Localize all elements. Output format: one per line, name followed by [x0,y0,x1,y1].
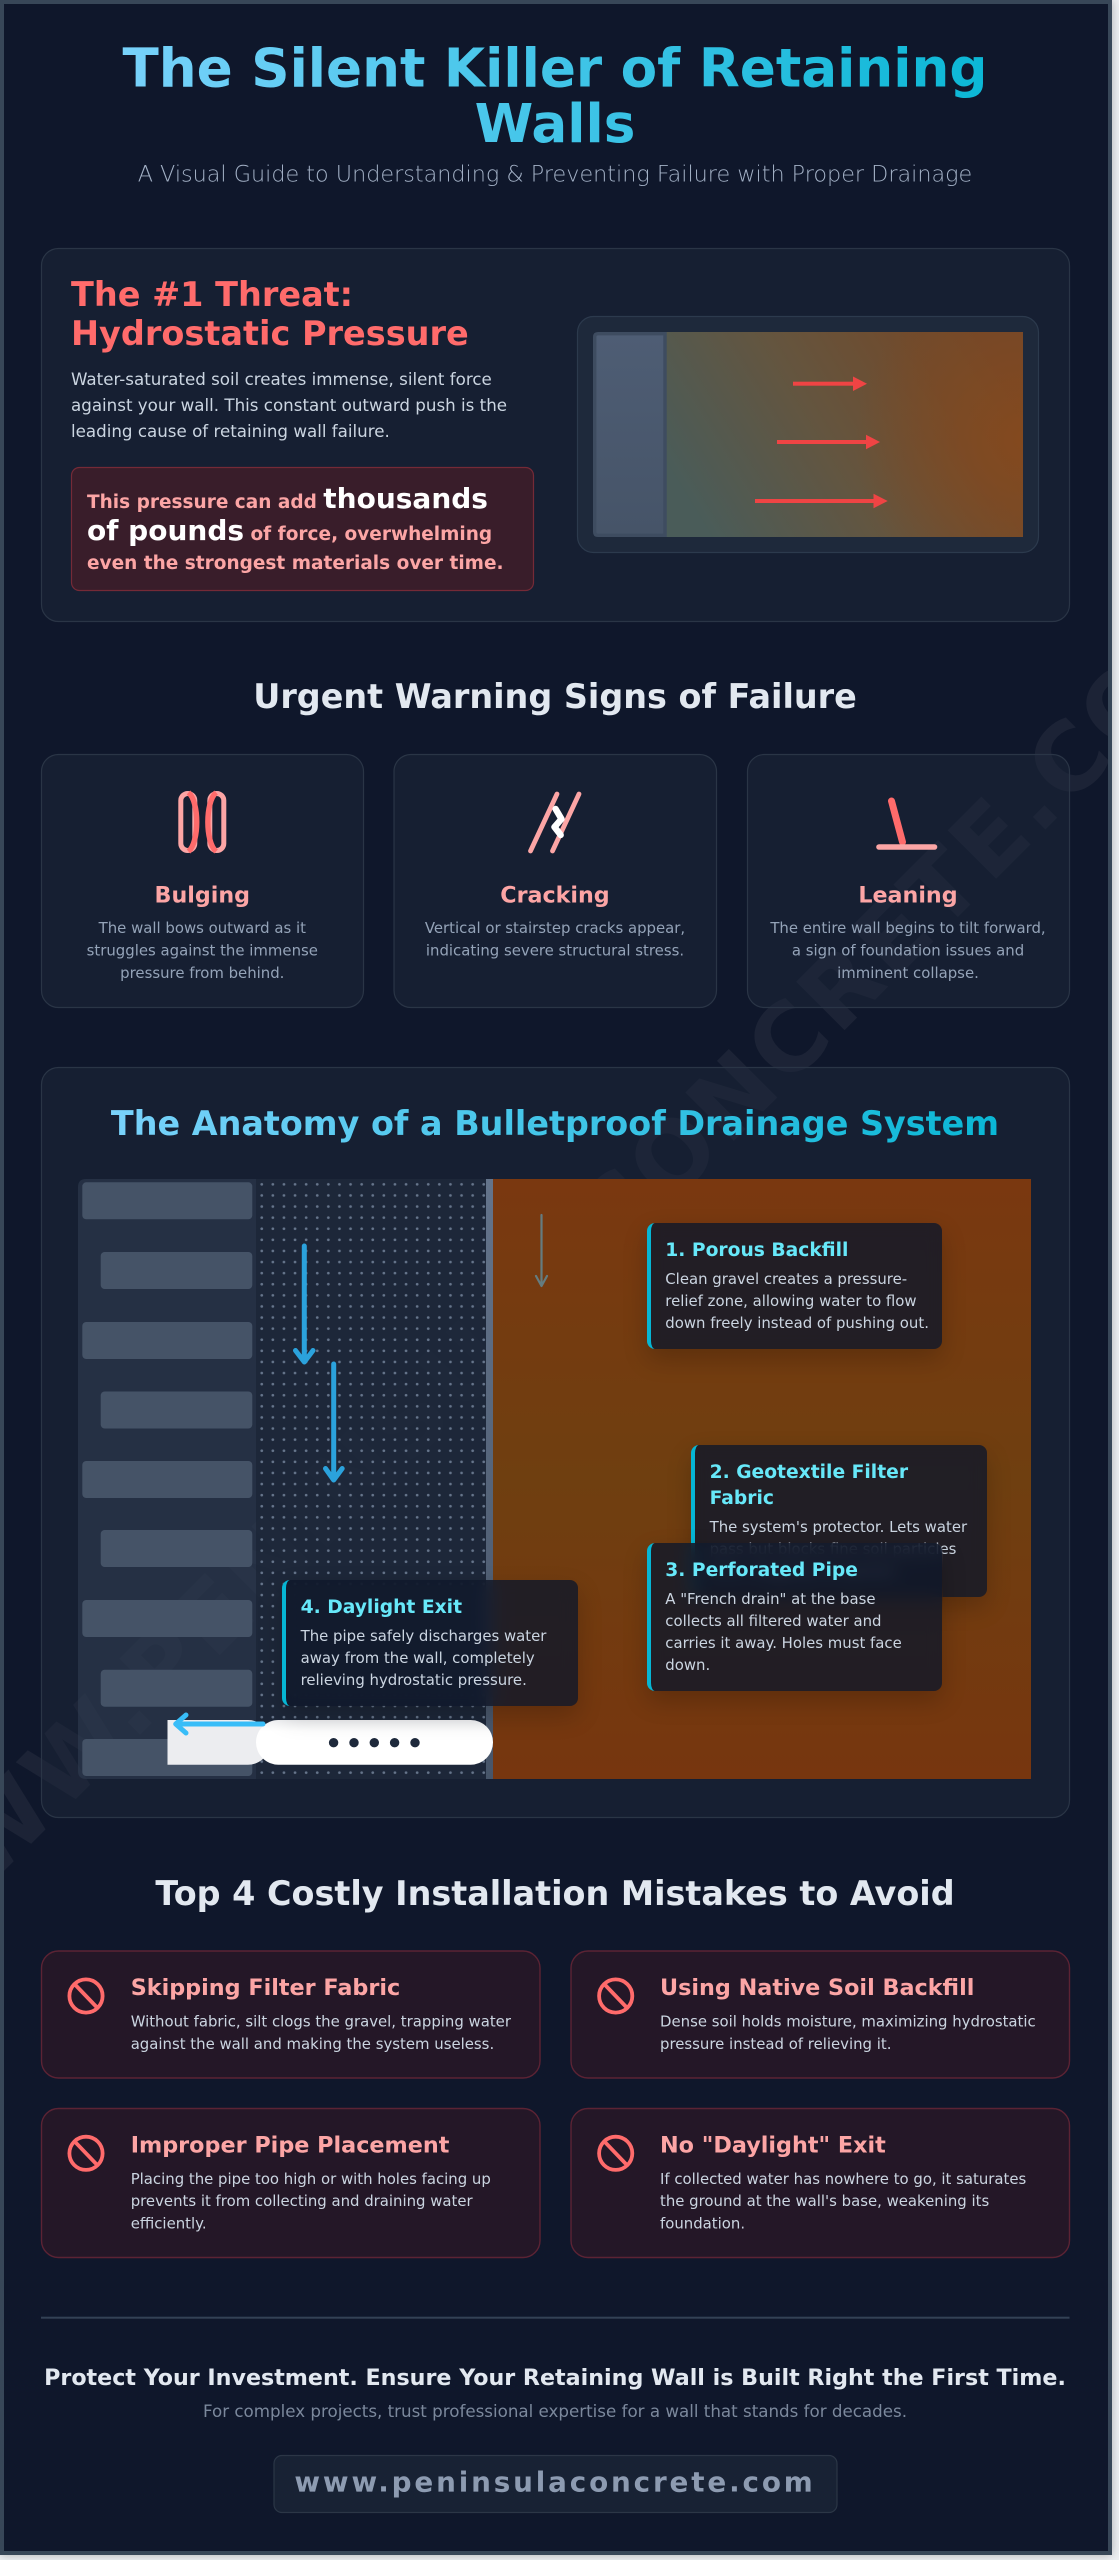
arrow: seepage in soil [536,1215,547,1286]
text: bulging description: pressure from behind. [120,964,284,982]
gravel backfill [256,1179,486,1779]
callout: daylight exit: The pipe safely discharges water [301,1627,546,1645]
text: cracking description [425,919,685,959]
label: cracking: Cracking [500,883,610,909]
icon: bulging wall [181,792,224,852]
text: pipe placement description: prevents it from collecting and draining water [131,2192,474,2210]
callout: geotextile filter fabric: Fabric [710,1488,774,1509]
title: The Silent Killer of Retaining [123,38,987,100]
callout: geotextile filter fabric: from clogging the gravel. [710,1562,898,1580]
callout: geotextile filter fabric: 2. Geotextile Filter [710,1462,908,1483]
callout: thousands of pounds [72,468,534,590]
callout: geotextile filter fabric [691,1445,987,1597]
text: daylight description: foundation. [660,2214,745,2232]
callout: geotextile filter fabric: pass but blocks fine soil particles [710,1540,956,1558]
callout: daylight exit: relieving hydrostatic pressure. [301,1671,527,1689]
soil [666,332,1023,537]
heading: anatomy: The Anatomy of a Bulletproof Drainage System [111,1104,999,1143]
callout: porous backfill: 1. Porous Backfill [665,1240,848,1261]
heading: hydrostatic pressure: Hydrostatic Pressure [71,314,469,353]
icon: leaning wall [879,801,934,847]
text: pipe placement description [131,2170,491,2232]
text: bulging description: The wall bows outward as it [98,919,306,937]
title: improper pipe placement: Improper Pipe Placement [131,2133,450,2159]
arrow: pressure bottom [755,494,888,508]
website url box [274,2456,837,2512]
text: leaning description: The entire wall begins to tilt forward, [769,919,1046,937]
text: pipe placement description: efficiently. [131,2214,207,2232]
text block: threat description: Water-saturated soil creates immense, silent force [71,369,492,389]
heading: warning signs: Urgent Warning Signs of Failure [253,677,857,716]
text: daylight description: the ground at the wall's base, weakening its [660,2192,989,2210]
callout: perforated pipe: 3. Perforated Pipe [665,1560,858,1581]
filter fabric [486,1179,493,1779]
callout: perforated pipe: down. [665,1656,710,1674]
callout: thousands of pounds: even the strongest materials over time. [87,553,504,574]
callout: porous backfill: relief zone, allowing water to flow [665,1292,917,1310]
heading: hydrostatic pressure: The #1 Threat: [71,275,353,314]
text: cracking description: Vertical or stairstep cracks appear, [425,919,685,937]
icon: prohibited [599,1979,632,2013]
arrow: pressure middle [777,435,880,449]
text block: threat description: against your wall. This constant outward push is the [71,395,507,415]
callout: thousands of pounds: of pounds of force, overwhelming [87,514,492,547]
title: native soil backfill: Using Native Soil Backfill [660,1975,974,2001]
text block: threat description [71,369,507,441]
text: bulging description [87,919,318,982]
callout: perforated pipe: A "French drain" at the base [665,1590,876,1608]
callout: perforated pipe: carries it away. Holes must face [665,1634,902,1652]
wall [595,334,665,535]
text: native soil description [660,2013,1036,2053]
text: cracking description: indicating severe structural stress. [426,941,684,959]
callout: daylight exit [282,1580,578,1706]
callout: geotextile filter fabric: The system's protector. Lets water [710,1518,967,1536]
diagram: pressure on wall [578,316,1038,552]
callout: daylight exit: away from the wall, completely [301,1649,535,1667]
icon: prohibited [599,2137,632,2170]
text: daylight description [660,2170,1027,2232]
panel: native soil backfill [571,1951,1070,2078]
title: Walls [475,93,635,155]
icon: prohibited [69,2137,103,2170]
text: leaning description [769,919,1046,982]
soil [493,1179,1031,1779]
label: bulging: Bulging [155,883,250,909]
panel: no daylight exit [571,2108,1070,2258]
text block: threat description: leading cause of retaining wall failure. [71,421,390,441]
panel: improper pipe placement [42,2108,540,2258]
arrow: daylight discharge [176,1715,263,1733]
text: daylight description: If collected water has nowhere to go, it saturates [660,2170,1027,2188]
icon: prohibited [69,1979,103,2013]
heading: hydrostatic pressure [71,275,469,353]
title [123,38,987,155]
callout: porous backfill: Clean gravel creates a pressure- [665,1270,907,1288]
heading: mistakes: Top 4 Costly Installation Mistakes to Avoid [155,1874,955,1913]
text: native soil description: Dense soil holds moisture, maximizing hydrostatic [660,2013,1036,2031]
callout: perforated pipe [647,1543,942,1691]
panel: cracking [394,754,716,1008]
text: skipping description: Without fabric, silt clogs the gravel, trapping water [131,2013,512,2031]
arrow: water flow 2 [326,1364,342,1480]
callout: porous backfill [647,1223,942,1349]
panel: hydrostatic pressure threat [42,248,1070,622]
block wall [78,1179,256,1779]
icon: cracked wall [530,794,579,851]
callout: perforated pipe: collects all filtered water and [665,1612,882,1630]
text: native soil description: pressure instead of relieving it. [660,2035,891,2053]
panel: leaning [748,754,1070,1008]
subtitle: A Visual Guide to Understanding & Preventing Failure with Proper Drainage [138,162,972,188]
footer subtext: For complex projects, trust professional expertise for a wall that stands for decades. [203,2401,907,2421]
perforated pipe [256,1720,493,1765]
arrow: water flow 1 [296,1246,313,1362]
panel: bulging [42,754,364,1008]
footer headline: Protect Your Investment. Ensure Your Retaining Wall is Built Right the First Time. [44,2365,1066,2391]
text: leaning description: a sign of foundation issues and [792,941,1024,959]
text: leaning description: imminent collapse. [837,964,979,982]
callout: porous backfill: down freely instead of pushing out. [665,1314,929,1332]
text: skipping description: against the wall and making the system useless. [131,2035,494,2053]
callout: daylight exit: 4. Daylight Exit [301,1597,462,1618]
arrow: pressure top [793,376,867,391]
pipe exit extension [168,1720,270,1765]
website url box: www.peninsulaconcrete.com [294,2466,816,2499]
callout: thousands of pounds: This pressure can add thousands [87,482,488,515]
label: leaning: Leaning [858,883,958,909]
title: skipping filter fabric: Skipping Filter Fabric [131,1975,400,2001]
panel: skipping filter fabric [42,1951,540,2078]
text: bulging description: struggles against the immense [87,941,318,959]
text: pipe placement description: Placing the pipe too high or with holes facing up [131,2170,491,2188]
panel: anatomy of drainage system [42,1068,1070,1818]
title: no daylight exit: No "Daylight" Exit [660,2133,886,2159]
text: skipping description [131,2013,512,2053]
